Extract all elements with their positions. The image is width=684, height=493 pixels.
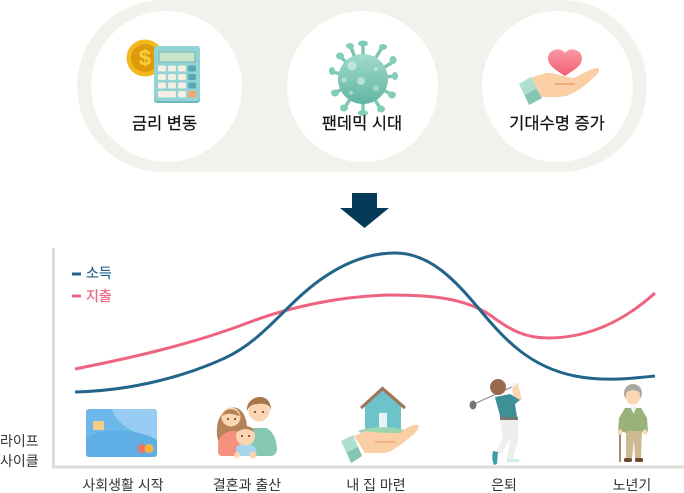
labels: life stages: 은퇴 xyxy=(491,477,517,493)
labels: life stages: 사회생활 시작 xyxy=(82,477,164,493)
label: longer life: 기대수명 증가 xyxy=(509,114,605,133)
icon: coin and calculator xyxy=(126,40,200,103)
icon: golfer xyxy=(470,379,522,465)
legend: expense: 지출 xyxy=(86,288,112,304)
arrow: down xyxy=(340,193,389,228)
curve: income xyxy=(75,253,655,392)
panel: longer life expectancy xyxy=(482,11,633,162)
chart: life cycle income and expense curves xyxy=(54,248,684,467)
icon: family xyxy=(217,397,277,458)
legend: income: 소득 xyxy=(86,265,112,281)
legend: expense xyxy=(72,288,112,304)
icon: coin and calculator: $ xyxy=(139,46,151,70)
y-axis label: 사이클 xyxy=(0,453,39,469)
icon: elderly person xyxy=(618,384,648,462)
labels: life stages: 노년기 xyxy=(613,477,651,493)
labels: life stages: 내 집 마련 xyxy=(346,477,406,493)
panel: interest rate change xyxy=(91,11,242,162)
icon: virus xyxy=(329,40,398,116)
labels: life stages: 결혼과 출산 xyxy=(213,477,281,493)
label: pandemic: 팬데믹 시대 xyxy=(322,114,402,133)
icon: hand holding heart xyxy=(519,49,599,105)
y-axis label: 라이프 xyxy=(0,433,39,449)
legend: income xyxy=(72,265,112,281)
curve: expense xyxy=(75,293,655,369)
icon: hand holding house xyxy=(341,388,418,463)
label: interest rate: 금리 변동 xyxy=(132,114,197,133)
axes xyxy=(54,248,684,467)
panel: pandemic xyxy=(287,11,438,162)
icon: credit card xyxy=(86,409,157,457)
labels: life stages xyxy=(82,477,651,493)
panel: factors band xyxy=(77,0,647,172)
